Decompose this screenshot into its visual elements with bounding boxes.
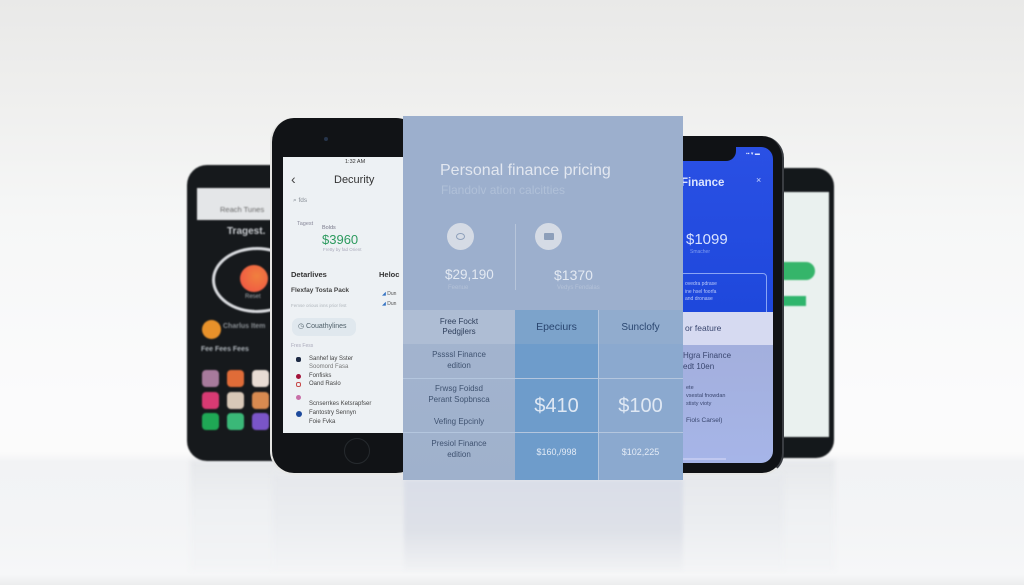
green balance: $3960 [322, 232, 358, 247]
header cell two: Epeciurs [536, 321, 577, 333]
back left title: Tragest. [227, 226, 265, 237]
feature body [660, 345, 773, 463]
reflection: pricing card [404, 480, 683, 570]
table: pricing comparison [403, 310, 683, 480]
close icon: × [756, 175, 761, 185]
price note: Smacher [690, 249, 710, 255]
row three price two: $102,225 [622, 447, 659, 457]
outlined box [650, 273, 767, 323]
list: Scnserrkes Ketsrapfser [309, 401, 371, 407]
outlined box: ine hsel foorfa [685, 288, 716, 294]
list: Soomord Fasa [309, 364, 348, 370]
green button [782, 296, 806, 306]
row note: Femse orious inns prior fest [291, 303, 347, 308]
column two background [515, 310, 598, 480]
price: $1099 [686, 231, 728, 248]
heading: Personal finance pricing [440, 162, 611, 179]
price one: $29,190 [445, 267, 494, 282]
feature row two: vsestal fnowdan [686, 393, 725, 399]
column one background [403, 310, 515, 480]
icon: card badge [535, 223, 562, 250]
small label: Tagest [297, 221, 313, 227]
home button [344, 438, 370, 464]
back left badge label: Charlus Item [223, 323, 265, 330]
price 100: $100 [618, 395, 663, 417]
row three label [431, 439, 487, 459]
header cell one: Pedgjlers [442, 327, 476, 336]
reflection: front phones [272, 474, 784, 570]
phone: front left [270, 118, 420, 475]
screen title: Decurity [334, 174, 374, 186]
header column tint [515, 310, 683, 344]
list heading: Fres Fess [291, 343, 313, 349]
row one label [432, 350, 486, 370]
phone: back right [760, 168, 834, 458]
feature header row: or feature [685, 323, 721, 333]
status bar: 1:32 AM [345, 159, 365, 165]
header cell one: Free Fockt [440, 317, 478, 326]
camera [324, 137, 328, 141]
back left label row: Fee Fees Fees [201, 346, 249, 353]
feature row one: edt 10en [683, 362, 714, 370]
header cell one [440, 317, 478, 336]
row one label: Pssssl Finance [432, 350, 486, 359]
back left orange badge [202, 320, 221, 339]
price two label: Vedys Fendalas [557, 285, 600, 291]
header cell three: Sunclofy [621, 322, 660, 333]
row two label: Frwsg Foidsd [435, 384, 483, 393]
row two note: Vefing Epcinly [434, 417, 484, 426]
list: Foie Fvka [309, 419, 335, 425]
blue app header [660, 147, 773, 312]
back left screen header [197, 188, 297, 220]
section heading two: Heloc [379, 270, 399, 279]
feature row two: ete [686, 385, 694, 391]
list: Fantostry Sennyn [309, 410, 356, 416]
search row: ⌕ fds [293, 197, 307, 204]
list: Fonfisks [309, 373, 331, 379]
back left dot label: Reset [245, 294, 261, 300]
row two label [428, 384, 490, 404]
pill [292, 318, 356, 336]
divider [515, 224, 516, 290]
outlined box: ovedra pdrase [685, 281, 717, 287]
row title: Flexfay Tosta Pack [291, 287, 349, 294]
notch [660, 145, 736, 161]
balance label: Bolds [322, 225, 336, 231]
green toggle [782, 262, 815, 280]
list [296, 356, 372, 425]
front left screen [283, 157, 421, 433]
back left orange dot [240, 265, 268, 292]
app title: Finance [681, 177, 724, 189]
feature row two [686, 385, 726, 407]
panel: pricing card [403, 116, 683, 480]
phone: back left [187, 165, 297, 461]
row two label: Perant Sopbnsca [428, 395, 490, 404]
row lines [403, 378, 683, 379]
outlined box: and dronase [685, 296, 713, 302]
column three background [598, 310, 683, 480]
back chevron: ‹ [291, 171, 296, 187]
subheading: Flandolv ation calcitties [441, 183, 565, 197]
status icons: ▪▪ ▾ ▬ [746, 151, 760, 157]
row three label: Presiol Finance [431, 439, 487, 448]
row three price one: $160,/998 [536, 447, 577, 457]
blue bullets [382, 291, 396, 307]
feature row three: Fiols Carsel) [686, 417, 722, 424]
back right screen [782, 192, 829, 437]
section heading: Detarlives [291, 270, 327, 279]
back left app icons [201, 369, 270, 431]
row one label: edition [447, 361, 471, 370]
reflection: outer phones [190, 460, 835, 570]
feature row two: stisty vioty [686, 401, 711, 407]
phone: front right [660, 136, 784, 475]
row three label: edition [447, 450, 471, 459]
progress line [660, 458, 726, 460]
list: Oand Raslo [309, 381, 341, 387]
price two: $1370 [554, 267, 593, 283]
header left tint [403, 310, 515, 344]
feature header row [660, 312, 773, 345]
balance note: Fretty by fad Orient [323, 247, 362, 252]
price 410: $410 [534, 395, 579, 417]
price one label: Feenue [448, 285, 468, 291]
list: Sanhef lay Sster [309, 356, 353, 362]
back left ring dial [212, 247, 302, 313]
back left screen header: Reach Tunes [220, 205, 264, 214]
feature row one [683, 351, 731, 370]
blue bullets: ◢ Dun [382, 301, 396, 307]
feature row one: Hgra Finance [683, 351, 731, 360]
blue bullets: ◢ Dun [382, 291, 396, 297]
pill: ◷ Couathylines [298, 323, 347, 330]
icon: eye badge [447, 223, 474, 250]
